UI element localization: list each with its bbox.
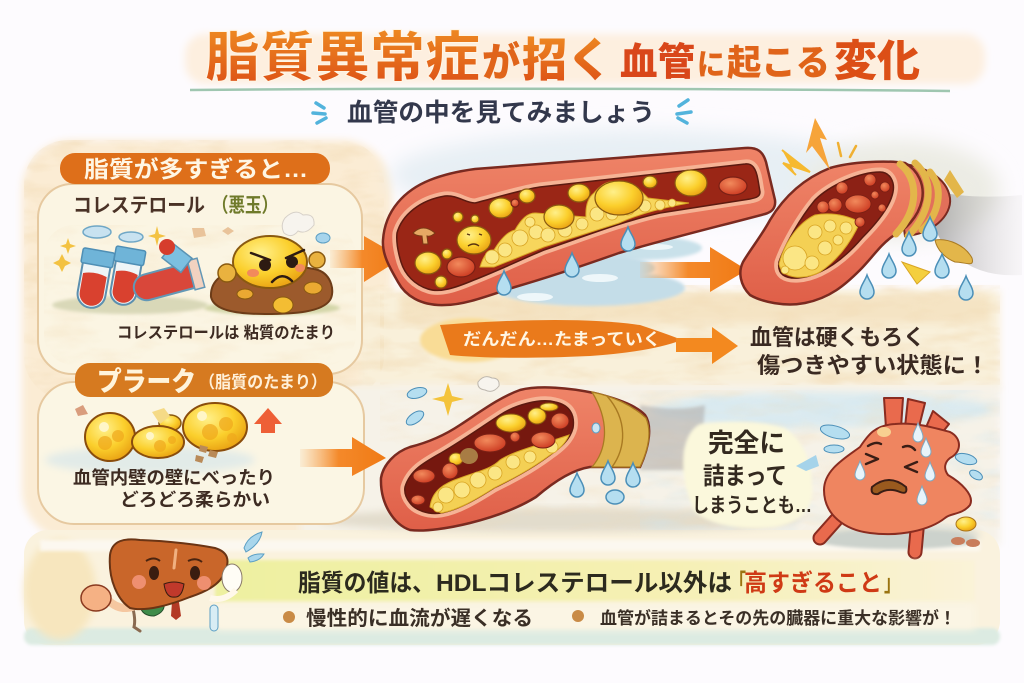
header: too much lipid bbox=[60, 153, 330, 184]
headline: 「 bbox=[730, 570, 746, 597]
text: vessels become brittle: 傷つきやすい状態に！ bbox=[757, 353, 989, 378]
banner: gradually accumulates bbox=[420, 318, 738, 364]
speech bubble: 完全に bbox=[708, 428, 785, 458]
title: 血管 bbox=[620, 42, 695, 84]
speech bubble bbox=[683, 422, 812, 528]
panel: plaque bbox=[38, 363, 364, 524]
label: LDL cholesterol: （悪玉） bbox=[212, 194, 278, 217]
headline: 高すぎること bbox=[744, 569, 882, 597]
icon: test tubes bbox=[52, 226, 208, 314]
speech bubble: しまうことも… bbox=[692, 495, 812, 517]
illustration: blocked artery bbox=[381, 377, 705, 531]
subtitle: 血管の中を見てみましょう bbox=[347, 99, 655, 127]
text: plaque description: 血管内壁の壁にべったり bbox=[73, 467, 275, 488]
icon: crying heart bbox=[796, 398, 984, 552]
drops bbox=[882, 254, 896, 278]
plaque bbox=[480, 182, 689, 267]
icon: liver mascot bbox=[81, 532, 264, 631]
illustration: damaged artery bbox=[740, 118, 1022, 304]
title: 変化 bbox=[834, 38, 920, 86]
header: plaque: （脂質のたまり） bbox=[199, 373, 327, 392]
drops and sparkles bbox=[570, 473, 584, 497]
icon: angry cholesterol blob bbox=[192, 212, 340, 315]
header: plaque bbox=[75, 363, 333, 397]
title: 脂質異常症 bbox=[205, 28, 480, 88]
caption: cholesterol: コレステロールは 粘質のたまり bbox=[117, 324, 335, 342]
label: LDL cholesterol: コレステロール bbox=[73, 195, 205, 217]
arrow: narrowed to damaged bbox=[640, 247, 747, 292]
globules bbox=[415, 170, 707, 288]
puddle bbox=[495, 236, 702, 306]
speech bubble: 詰まって bbox=[703, 463, 787, 490]
plaque bbox=[430, 435, 569, 513]
headline: 」 bbox=[884, 570, 900, 597]
label: LDL cholesterol bbox=[73, 194, 278, 217]
face bbox=[866, 443, 917, 472]
text: plaque description: どろどろ柔らかい bbox=[120, 490, 270, 510]
text: vessels become brittle: 血管は硬くもろく bbox=[750, 325, 925, 350]
bandage bbox=[896, 163, 938, 236]
headline: 脂質の値は、 bbox=[298, 570, 435, 597]
title: 起こる bbox=[727, 44, 830, 83]
icon: red up arrow bbox=[254, 408, 282, 433]
header: plaque: プラーク bbox=[97, 367, 196, 397]
title underline bbox=[190, 89, 950, 91]
title: に bbox=[697, 49, 725, 82]
icon: fat globules bbox=[75, 403, 247, 463]
title: が bbox=[482, 40, 520, 85]
text: vessels become brittle bbox=[750, 325, 989, 378]
illustration: narrowed artery bbox=[383, 148, 775, 306]
banner: gradually accumulates: だんだん…たまっていく bbox=[463, 330, 661, 349]
panel: summary bbox=[81, 532, 975, 631]
title: 招く bbox=[522, 34, 612, 86]
faded vessel tail bbox=[930, 190, 1022, 275]
plaque bbox=[779, 214, 860, 277]
arrow bbox=[676, 327, 738, 364]
arrow: cholesterol to vessel bbox=[330, 236, 402, 282]
text: plaque description bbox=[73, 467, 275, 510]
bullet: organ damage: 血管が詰まるとその先の臓器に重大な影響が！ bbox=[600, 608, 956, 628]
headline: HDLコレステロール以外は bbox=[436, 570, 732, 597]
bullet: slows blood flow: 慢性的に血流が遅くなる bbox=[306, 606, 533, 630]
burst marks bbox=[806, 118, 830, 170]
headline bbox=[298, 569, 900, 597]
header: too much lipid: 脂質が多すぎると… bbox=[84, 156, 308, 182]
panel: cholesterol bbox=[38, 153, 362, 374]
bandage bbox=[592, 392, 649, 467]
arrow: plaque to vessel bbox=[300, 437, 386, 476]
title bbox=[185, 28, 985, 88]
